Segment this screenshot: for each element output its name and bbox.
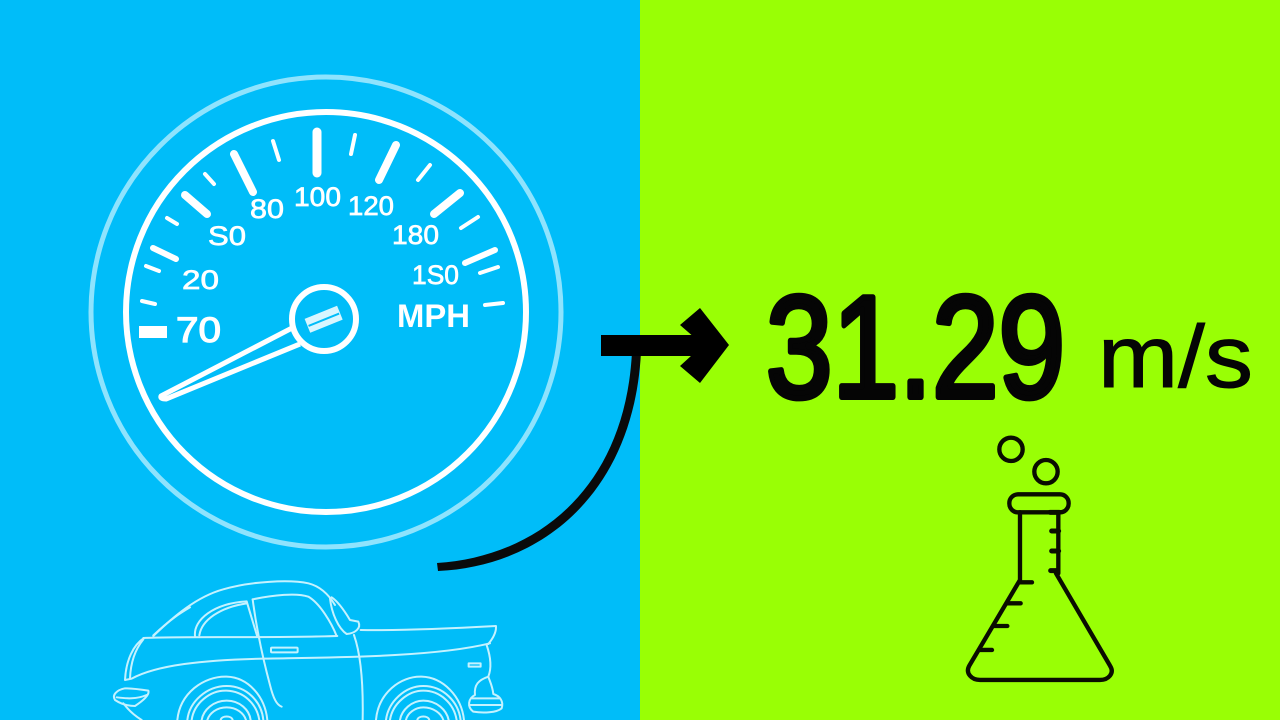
gauge speed labels: 1S0: [412, 260, 459, 290]
gauge speed labels: 120: [348, 191, 394, 221]
gauge speed labels: 80: [250, 194, 284, 224]
gauge speed labels: 70: [176, 311, 221, 350]
gauge major ticks: [139, 132, 495, 332]
flask bubbles: [999, 438, 1023, 461]
gauge speed labels: S0: [208, 221, 246, 251]
curved arrow from car to conversion: [437, 352, 641, 571]
icon: science flask: [968, 438, 1112, 680]
flask neck graduations: [1050, 512, 1059, 571]
gauge speed labels: 100: [294, 182, 341, 212]
car windows: [195, 601, 257, 637]
speed unit: m/s: [1098, 307, 1253, 406]
flask body: [968, 512, 1112, 680]
flask body graduations: [979, 582, 1032, 650]
speed value: 31.29: [766, 266, 1065, 428]
gauge inner ring: [126, 112, 526, 512]
gauge unit label MPH: MPH: [397, 298, 470, 334]
gauge speed labels: 180: [392, 220, 439, 250]
car belt line: [143, 636, 337, 638]
car outline: [114, 581, 502, 720]
gauge hub: [292, 287, 356, 351]
gauge needle: [161, 327, 300, 399]
gauge minor ticks: [142, 135, 503, 305]
speedometer gauge: [91, 77, 561, 547]
car door handle: [271, 648, 298, 652]
gauge speed labels: [176, 182, 459, 350]
car rear wheel: [376, 677, 464, 720]
gauge speed labels: 20: [182, 265, 219, 295]
panel: green SI units side: [640, 0, 1280, 720]
car front wheel: [177, 677, 267, 720]
car rear deck: [361, 626, 496, 644]
flask lip: [1009, 494, 1069, 512]
car bumpers: [469, 677, 502, 712]
car door lines: [253, 599, 282, 707]
car nose: [125, 638, 490, 680]
conversion arrow: [601, 308, 729, 383]
gauge outer ring: [91, 77, 561, 547]
car roof and hood: [153, 581, 335, 636]
car mirror: [330, 597, 359, 634]
panel: blue speedometer side: [0, 0, 640, 720]
car badge: [469, 663, 481, 667]
